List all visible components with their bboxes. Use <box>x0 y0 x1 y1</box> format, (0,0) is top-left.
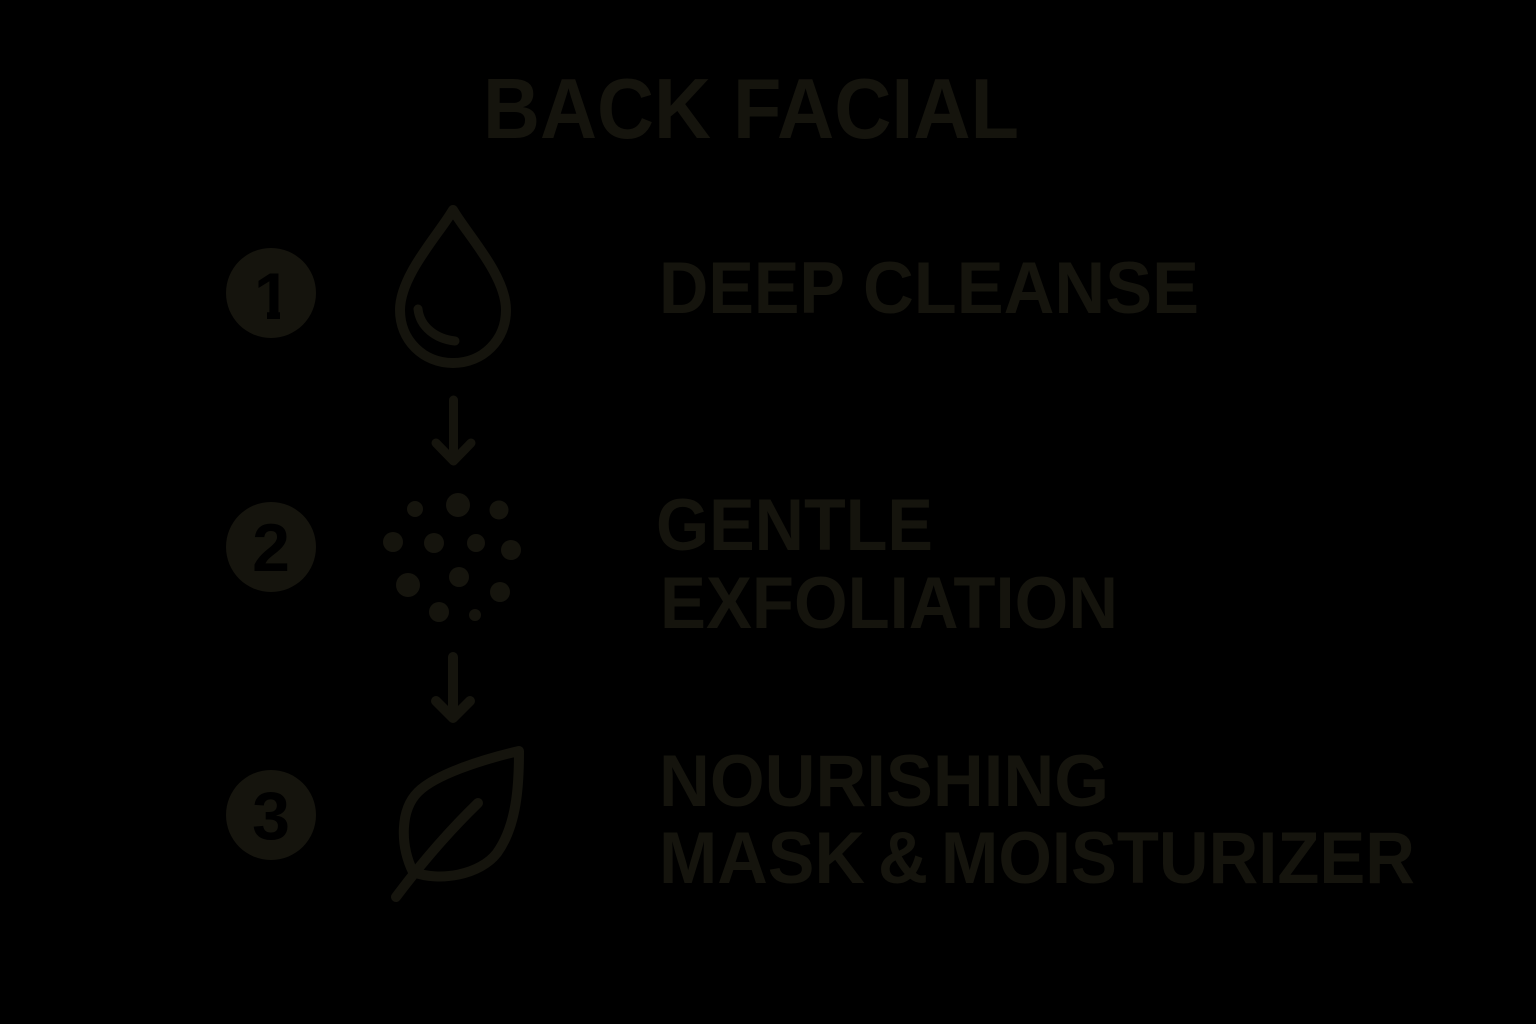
step 1 label <box>659 248 1199 329</box>
step 2 number badge <box>226 502 316 592</box>
title <box>483 62 1019 157</box>
step 1 number badge: 1 <box>254 259 291 333</box>
step 2 label: GENTLE <box>656 485 933 566</box>
step 1 label: DEEP <box>659 248 845 329</box>
icon: water drop <box>400 210 506 363</box>
icon: leaf <box>396 751 519 897</box>
step 3 number badge <box>226 770 316 860</box>
step 3 number badge: 3 <box>252 778 290 854</box>
step 3 label: MOISTURIZER <box>941 818 1415 899</box>
arrow: step 1 to step 2 <box>436 400 471 461</box>
step 3 label: & <box>878 818 928 899</box>
step 2 number badge: 2 <box>252 510 290 586</box>
step 2 label: EXFOLIATION <box>660 563 1118 644</box>
title: BACK <box>483 62 711 157</box>
arrow: step 2 to step 3 <box>436 657 470 718</box>
step 3 label <box>659 741 1415 899</box>
step 1 label: CLEANSE <box>863 248 1199 329</box>
step 1 number badge <box>226 248 316 338</box>
icon: exfoliation particles <box>383 493 521 622</box>
step 3 label: MASK <box>659 818 865 899</box>
step 3 label: NOURISHING <box>659 741 1109 822</box>
title: FACIAL <box>733 62 1019 157</box>
step 2 label <box>656 485 1118 644</box>
